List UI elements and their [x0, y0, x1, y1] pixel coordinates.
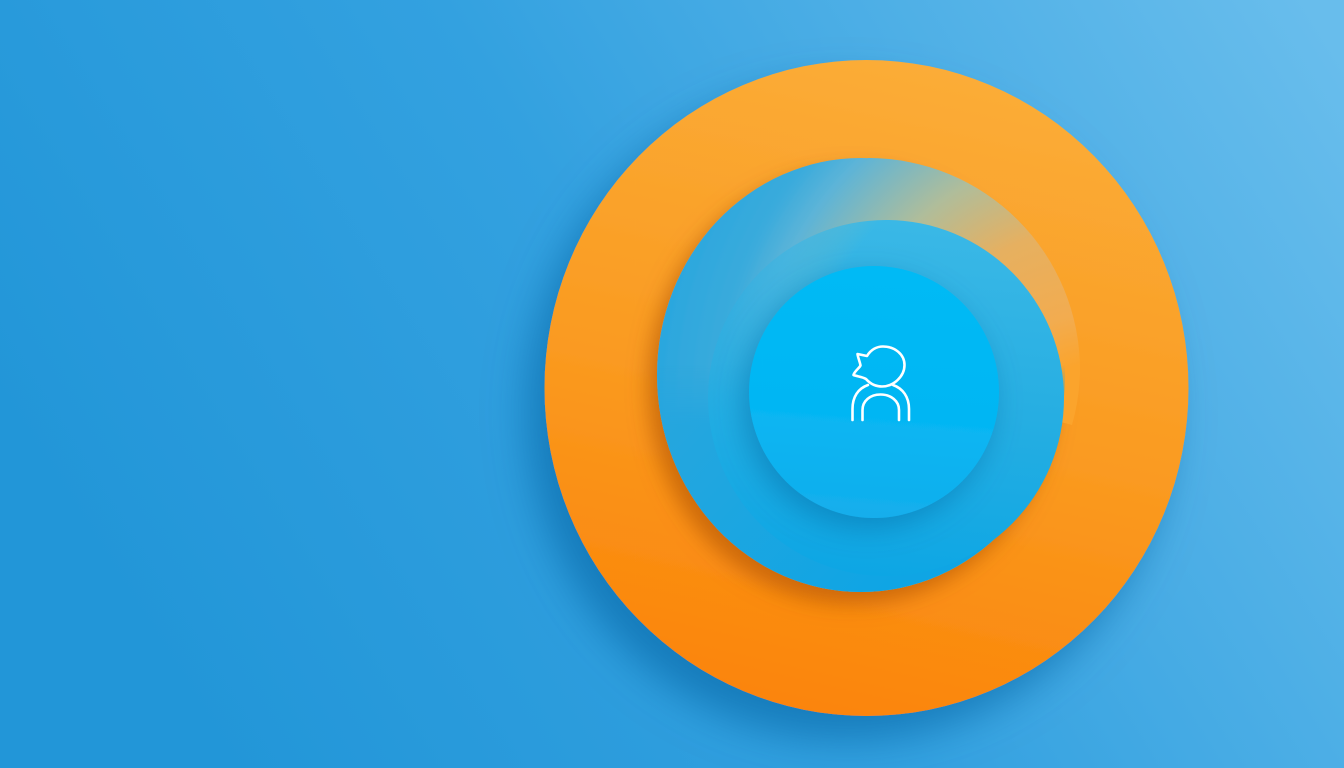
faded crescent: [868, 158, 1080, 425]
inner bright blue circle: [749, 266, 999, 518]
outer orange circle: [544, 60, 1188, 716]
icon head: [854, 346, 904, 386]
concentric circles: [544, 60, 1188, 716]
second-level blue circle: [708, 220, 1064, 540]
icon: person outline: [852, 346, 909, 420]
middle circle lower blue body: [657, 367, 1065, 592]
icon shoulders inner arc: [862, 394, 899, 420]
middle circle body: [657, 158, 1065, 592]
middle blue circle with faded upper-right edge: [657, 158, 1080, 592]
icon shoulders outer arc: [852, 385, 909, 420]
